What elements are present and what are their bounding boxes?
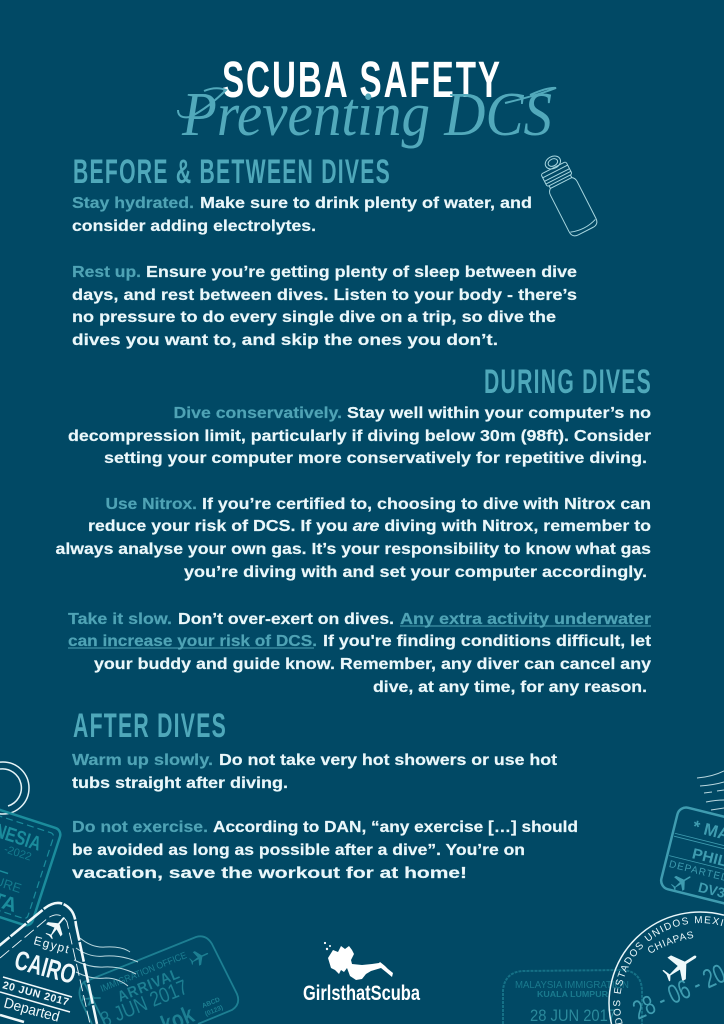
text block: use nitrox: Use Nitrox. [106,496,197,513]
heading: After dives: AFTER DIVES [73,707,227,745]
icon: water bottle [535,151,599,238]
title: Scuba Safety: SCUBA SAFETY [222,51,502,108]
text block: do not exercise: According to DAN, “any exercise […] should [213,819,578,836]
stamp: Cairo departed: Egypt [32,933,71,956]
stamp: Arrival Bangkok [79,936,238,1024]
text block: use nitrox: always analyse your own gas. It’s your responsibility to know what gas [56,541,651,558]
text block: dive conservatively: decompression limit, particularly if diving below 30m (98ft). Consider [68,428,651,445]
text block: take it slow: your buddy and guide know. Remember, any diver can cancel any [94,656,651,673]
text block: dive conservatively: setting your computer more conservatively for repetitive diving. [104,450,647,467]
stamp: Arrival Bangkok: IMMIGRATION OFFICE [99,950,188,995]
text block: rest up: days, and rest between dives. Listen to your body - there’s [72,287,577,304]
text block: stay hydrated: Make sure to drink plenty of water, and [200,195,532,212]
text block: take it slow: If you're finding conditions difficult, let [323,633,652,650]
text block: use nitrox: If you’re certified to, choosing to dive with Nitrox can [202,496,651,513]
stamp: Estados Unidos Mexicanos, Chiapas: CHIAPAS [648,932,694,953]
text block: take it slow: Take it slow. [68,611,172,628]
text block: warm up slowly: Warm up slowly. [72,752,213,769]
text block: do not exercise: be avoided as long as possible after a dive”. You’re on [72,842,525,859]
text block: stay hydrated: Stay hydrated. [72,195,194,212]
text block: use nitrox: reduce your risk of DCS. If you are diving with Nitrox, remember to [88,518,651,535]
stamp: Arrival Bangkok: ARRIVAL [115,965,183,1006]
text block: rest up: Rest up. [72,264,141,281]
text block: do not exercise [72,819,578,882]
stamp: Cairo departed [0,903,97,1024]
text block: take it slow: dive, at any time, for any reason. [373,679,647,696]
text block: stay hydrated [72,195,532,235]
text block: warm up slowly [72,752,558,792]
stamp: Estados Unidos Mexicanos, Chiapas: DOS ESTADOS UNIDOS MEXICANOS [613,916,724,1024]
stamp: Philippines departed [659,806,724,916]
text block: rest up: Ensure you’re getting plenty of sleep between dive [146,264,577,281]
text block: do not exercise: Do not exercise. [72,819,208,836]
text block: do not exercise: vacation, save the workout for at home! [72,865,467,882]
stamp: Indonesia departure: -2022 [2,843,33,864]
logo: GirlsthatScuba diver [303,942,420,1005]
stamp: Malaysia immigration [503,970,642,1024]
stamp: Arrival Bangkok: ABCD [201,996,221,1010]
text block: take it slow: can increase your risk of DCS. [68,633,317,650]
text block: dive conservatively: Stay well within your computer’s no [347,405,651,422]
text block: take it slow [68,611,652,696]
text block: dive conservatively [68,405,651,467]
postmark wave lines: right [697,771,724,810]
text block: use nitrox: you’re diving with and set your computer accordingly. [184,564,647,581]
stamp: Malaysia immigration: KUALA LUMPUR [537,989,608,999]
subtitle: Preventing DCS: Preventing DCS [181,81,552,149]
logo: GirlsthatScuba diver: GirlsthatScuba [303,982,420,1005]
text block: take it slow: Any extra activity underwater [400,611,651,628]
heading: Before and between dives: BEFORE & BETWEEN DIVES [73,153,391,191]
decorative stamp: rope ring [0,762,29,814]
postmark wave lines: left [74,938,138,986]
text block: use nitrox [56,496,651,581]
stamp: Malaysia immigration: MALAYSIA IMMIGRATION [515,980,629,991]
stamp: Indonesia departure [0,792,62,927]
text block: dive conservatively: Dive conservatively. [174,405,342,422]
text block: rest up: no pressure to do every single dive on a trip, so dive the [72,309,556,326]
text block: stay hydrated: consider adding electrolytes. [72,218,316,235]
text block: warm up slowly: tubs straight after diving. [72,775,288,792]
stamp: Arrival Bangkok: (0123) [204,1004,224,1018]
stamp: Cairo departed: 20 JUN 2017 [1,979,70,1009]
text block: take it slow: Don’t over-exert on dives. [178,611,394,628]
text block: warm up slowly: Do not take very hot showers or use hot [219,752,558,769]
text block: rest up: dives you want to, and skip the ones you don’t. [72,332,498,349]
text block: rest up [72,264,577,349]
stamp: Cairo departed: CAIRO [11,945,79,990]
